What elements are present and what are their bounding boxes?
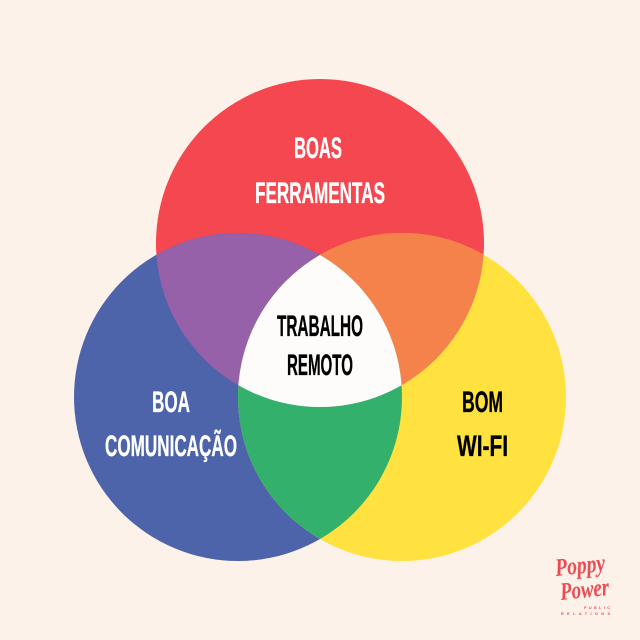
venn diagram (74, 79, 566, 561)
label: boa comunicação: BOA (152, 386, 190, 419)
logo: poppy power public relations (553, 550, 611, 616)
logo: poppy power public relations: RELATIONS (561, 612, 610, 616)
label: boas ferramentas (255, 132, 385, 210)
label: trabalho remoto (277, 310, 363, 382)
label: boas ferramentas: FERRAMENTAS (255, 177, 385, 210)
logo: poppy power public relations: Power (558, 574, 611, 606)
label: trabalho remoto: REMOTO (287, 349, 353, 382)
circle: bom wi-fi (238, 233, 566, 561)
overlap: red and yellow (orange) (238, 233, 484, 386)
label: boa comunicação (105, 386, 237, 463)
label: boa comunicação: COMUNICAÇÃO (105, 429, 237, 463)
label: bom wi-fi: BOM (462, 386, 503, 419)
label: bom wi-fi: WI-FI (457, 430, 508, 463)
circle: boas ferramentas (156, 79, 484, 407)
label: bom wi-fi (457, 386, 508, 463)
overlap: red and blue (purple) (156, 233, 320, 386)
overlap: blue and yellow (green) (238, 255, 402, 539)
label: trabalho remoto: TRABALHO (277, 310, 363, 343)
overlap: centre (white) (238, 255, 402, 407)
logo: poppy power public relations: PUBLIC (584, 606, 610, 610)
logo: poppy power public relations: Poppy (553, 550, 607, 582)
circle: boa comunicação (74, 233, 402, 561)
label: boas ferramentas: BOAS (294, 132, 342, 165)
